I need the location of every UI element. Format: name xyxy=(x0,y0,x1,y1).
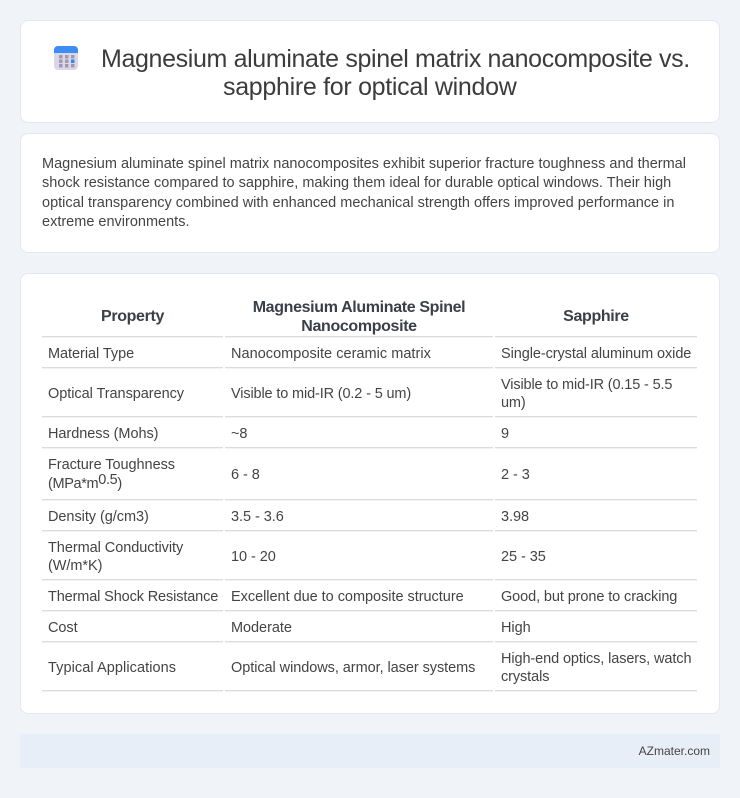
table header: Magnesium Aluminate Spinel Nanocomposite xyxy=(253,299,465,335)
row: Material Type xyxy=(48,346,691,362)
text: Fracture Toughness xyxy=(48,457,175,473)
text: 10 - 20 xyxy=(231,549,276,565)
text: 3.5 - 3.6 xyxy=(231,509,284,525)
title: sapphire for optical window xyxy=(223,73,516,101)
text: High-end optics, lasers, watch xyxy=(501,651,691,667)
text: crystals xyxy=(501,669,549,685)
text: Nanocomposite ceramic matrix xyxy=(231,346,431,362)
text: (MPa*m0.5) xyxy=(48,472,122,492)
icon: calendar xyxy=(54,46,78,70)
text: Typical Applications xyxy=(48,660,176,676)
panel: title card xyxy=(20,20,720,123)
row: Density xyxy=(48,509,529,525)
text: Cost xyxy=(48,620,78,636)
intro paragraph: extreme environments. xyxy=(42,214,189,230)
table header: Sapphire: Sapphire xyxy=(563,308,629,325)
row: Typical Applications xyxy=(48,651,691,685)
table header: Magnesium Aluminate Spinel Nanocomposite: Magnesium Aluminate Spinel xyxy=(253,299,465,316)
footer credit: AZmater.com xyxy=(639,744,710,758)
intro paragraph xyxy=(42,156,686,230)
text: Single-crystal aluminum oxide xyxy=(501,346,691,362)
text: (W/m*K) xyxy=(48,558,102,574)
text: Density (g/cm3) xyxy=(48,509,149,525)
text: Good, but prone to cracking xyxy=(501,589,677,605)
panel: intro text xyxy=(20,133,720,253)
text: Visible to mid-IR (0.2 - 5 um) xyxy=(231,386,411,402)
text: Moderate xyxy=(231,620,292,636)
text: Thermal Shock Resistance xyxy=(48,589,218,605)
text: Excellent due to composite structure xyxy=(231,589,464,605)
title xyxy=(101,45,690,101)
row: Fracture Toughness xyxy=(48,457,530,492)
intro paragraph: shock resistance compared to sapphire, making them ideal for durable optical windows. Their high xyxy=(42,175,671,191)
text: High xyxy=(501,620,531,636)
table header: Magnesium Aluminate Spinel Nanocomposite: Nanocomposite xyxy=(301,318,417,335)
text: 3.98 xyxy=(501,509,529,525)
row: Thermal Shock Resistance xyxy=(48,589,677,605)
text: Material Type xyxy=(48,346,134,362)
text: um) xyxy=(501,395,526,411)
text: 9 xyxy=(501,426,509,442)
text: 6 - 8 xyxy=(231,467,260,483)
text: Visible to mid-IR (0.15 - 5.5 xyxy=(501,377,672,393)
text: Optical windows, armor, laser systems xyxy=(231,660,475,676)
text: 2 - 3 xyxy=(501,467,530,483)
title: Magnesium aluminate spinel matrix nanocomposite vs. xyxy=(101,45,690,73)
text: Optical Transparency xyxy=(48,386,184,402)
panel: comparison table xyxy=(20,273,720,714)
intro paragraph: Magnesium aluminate spinel matrix nanocomposites exhibit superior fracture toughness and thermal xyxy=(42,156,686,172)
row: Optical Transparency xyxy=(48,377,672,411)
intro paragraph: optical transparency combined with enhanced mechanical strength offers improved performance in xyxy=(42,195,674,211)
row: Hardness xyxy=(48,426,509,442)
table header: Property: Property xyxy=(101,308,164,325)
row: Cost xyxy=(48,620,531,636)
text: 25 - 35 xyxy=(501,549,546,565)
text: ~8 xyxy=(231,426,247,442)
row: Thermal Conductivity xyxy=(48,540,546,574)
footer bar xyxy=(20,734,720,768)
text: Thermal Conductivity xyxy=(48,540,183,556)
text: Hardness (Mohs) xyxy=(48,426,158,442)
